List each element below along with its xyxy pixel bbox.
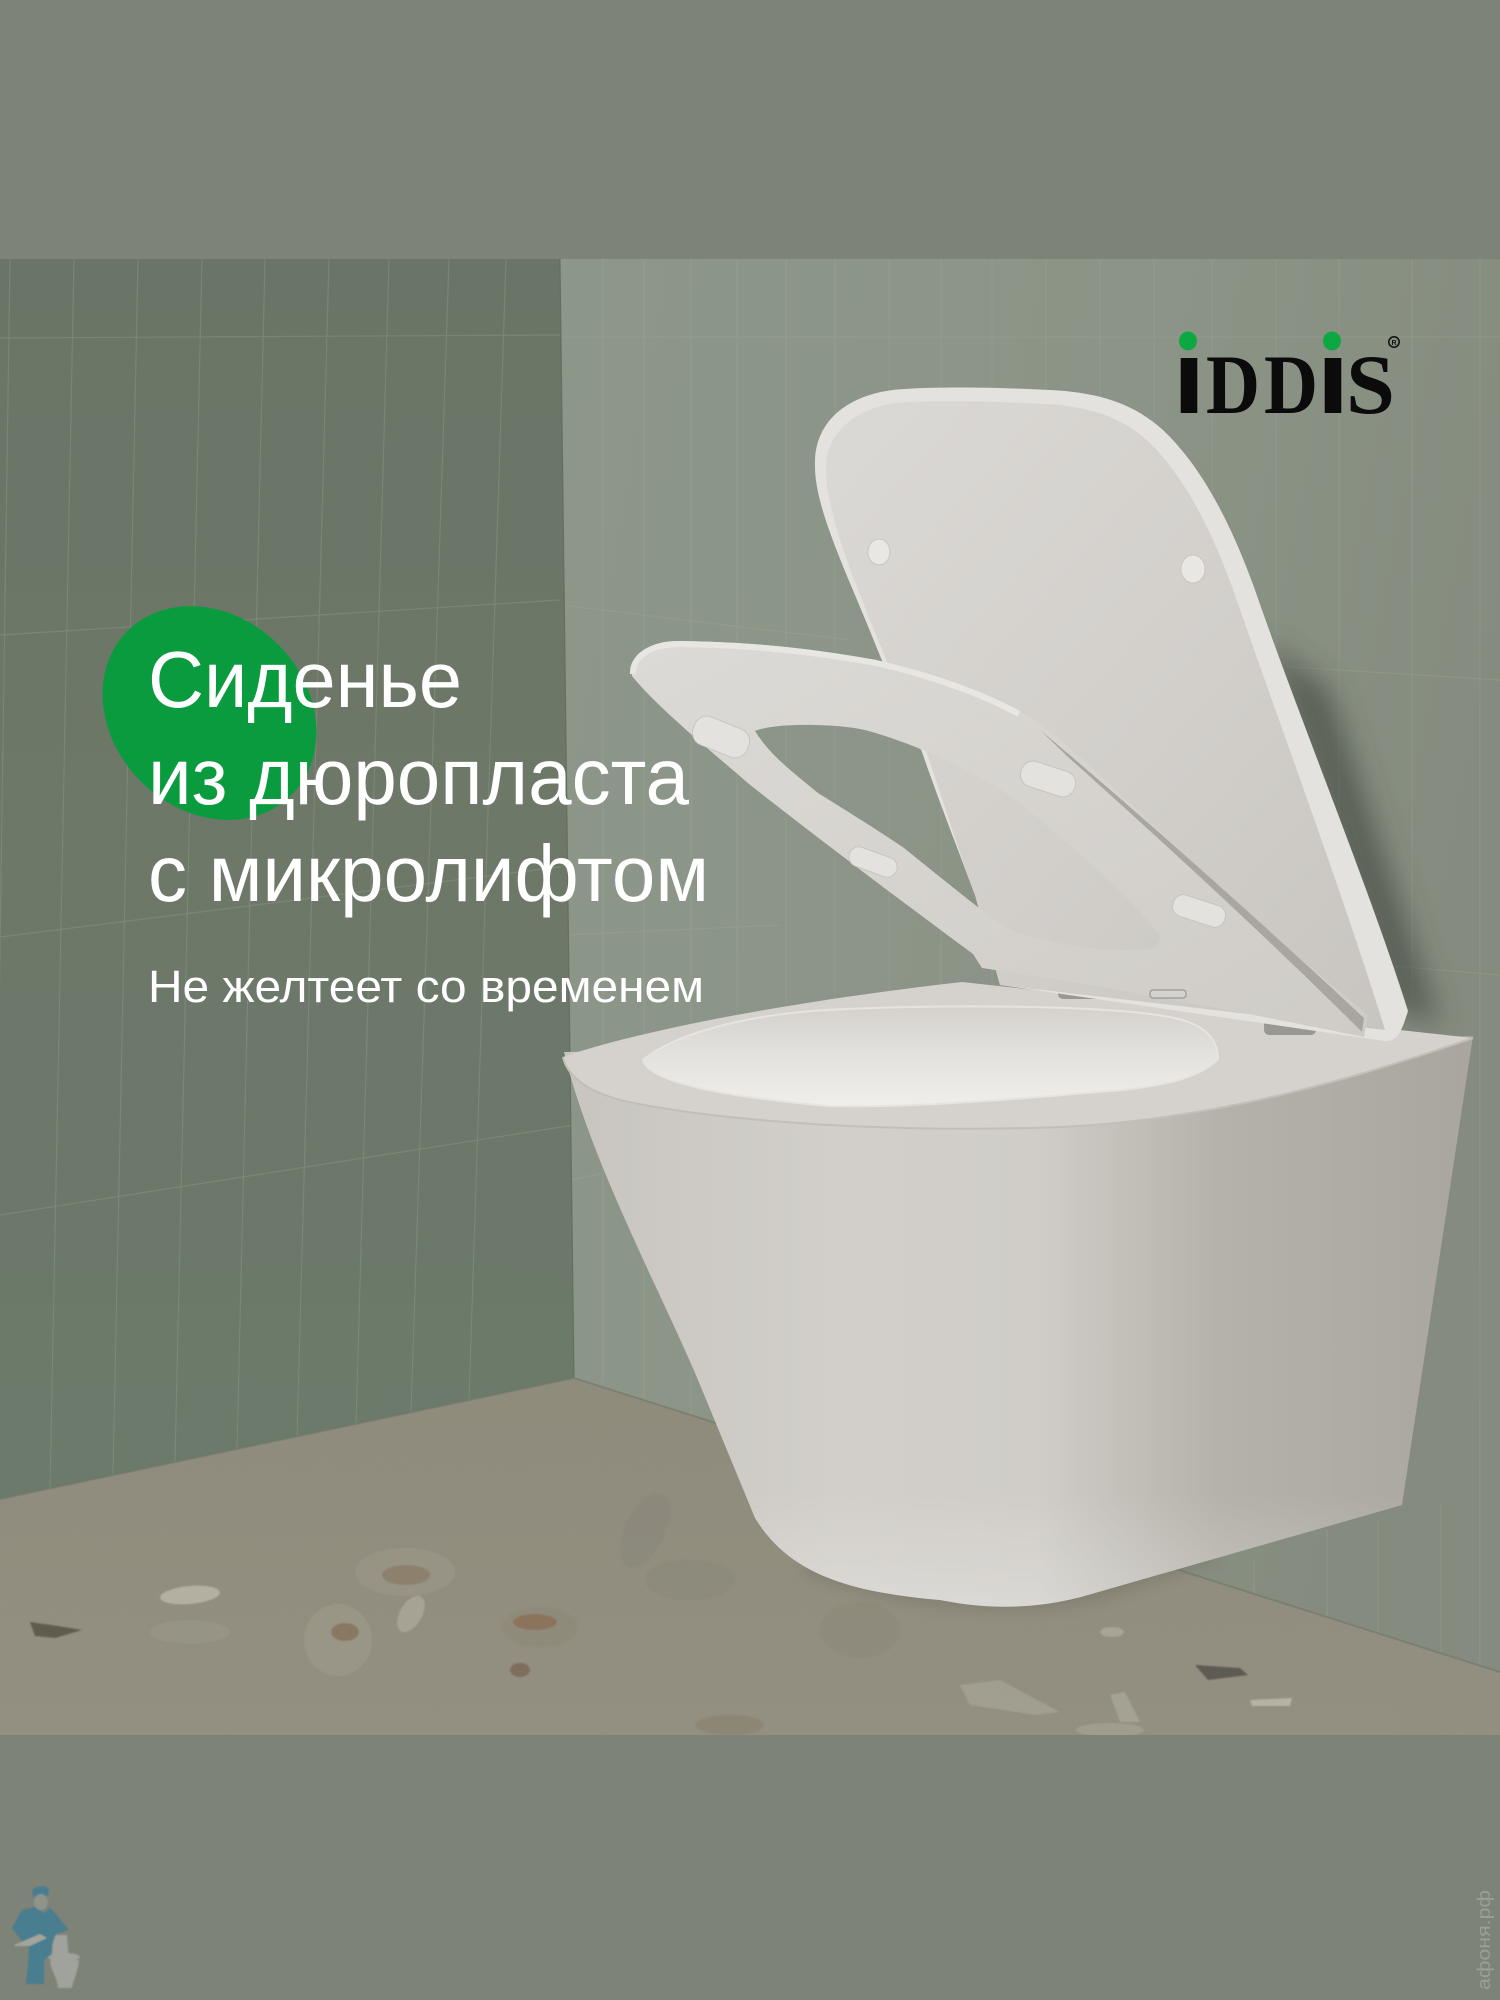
green blob (59, 562, 360, 864)
logo: IDDIS: D (1206, 338, 1260, 432)
right tiled wall (555, 259, 1500, 1735)
hinges (1058, 994, 1316, 1035)
lid shadow on wall (1265, 640, 1440, 1025)
bowl body (564, 1036, 1473, 1607)
wall corner edge (560, 259, 574, 1378)
plumber (12, 1886, 69, 1984)
lifted seat (632, 641, 1368, 1037)
floor stones (30, 1565, 1292, 1735)
seat bumpers (688, 712, 1228, 930)
logo: IDDIS: I (1173, 341, 1205, 430)
lid bumpers (868, 539, 1205, 583)
title: с микролифтом (148, 829, 709, 918)
logo: IDDIS: I (1317, 341, 1349, 430)
toilet floor shadow (810, 1561, 1208, 1609)
bottom band (0, 1735, 1500, 2000)
seat hinge cover (1150, 990, 1186, 998)
watermark: афоня.рф (1474, 1890, 1494, 1990)
bowl interior (643, 1006, 1218, 1106)
photo: bathroom scene (0, 259, 1500, 1737)
terrazzo floor (0, 1378, 1500, 1737)
left tiled wall (0, 259, 574, 1500)
logo: IDDIS: S (1346, 338, 1395, 432)
toilet (48, 1935, 80, 1988)
toilet bowl (563, 982, 1473, 1607)
logo: IDDIS: D (1264, 338, 1318, 432)
title (148, 635, 709, 918)
title: Сиденье (148, 635, 462, 724)
subtitle: Не желтеет со временем (148, 961, 704, 1012)
icon: plumber mascot with toilet (12, 1886, 80, 1988)
title: из дюропласта (148, 732, 689, 821)
raised lid (815, 388, 1408, 1041)
logo: IDDIS: R (1391, 340, 1397, 347)
logo: IDDIS (1173, 332, 1399, 432)
bowl rim (563, 982, 1473, 1129)
seat side crease (1040, 730, 1364, 1032)
seat outer edge highlight (633, 644, 1019, 714)
top band (0, 0, 1500, 259)
